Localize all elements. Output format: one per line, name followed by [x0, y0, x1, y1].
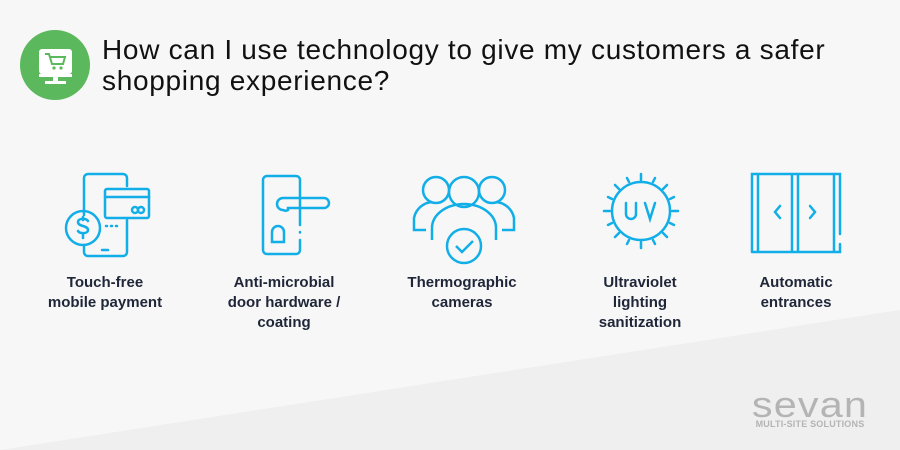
icon: green circle monitor cart — [20, 30, 90, 100]
icon: mobile payment — [64, 172, 150, 258]
label: cameras: cameras — [432, 294, 492, 311]
icon: door handle — [262, 174, 330, 256]
label: UV: lighting — [613, 294, 667, 311]
logo: sevan: MULTI-SITE SOLUTIONS — [756, 419, 864, 429]
label: cameras — [407, 274, 517, 311]
label: door: Anti-microbial — [234, 274, 334, 291]
label: mobile payment: mobile payment — [48, 294, 162, 311]
logo: sevan: sevan — [752, 384, 868, 425]
label: entrances — [759, 274, 833, 311]
label: UV: sanitization — [599, 314, 681, 331]
icon: automatic door — [750, 172, 842, 254]
label: mobile payment — [48, 274, 162, 311]
title: How can I use technology to give my customers a safer shopping experience? — [102, 34, 825, 96]
label: mobile payment: Touch-free — [67, 274, 143, 291]
label: door: coating — [257, 314, 311, 331]
label: UV — [599, 274, 681, 331]
label: door: door hardware / — [228, 294, 340, 311]
label: UV: Ultraviolet — [603, 274, 677, 291]
label: cameras: Thermographic — [407, 274, 517, 291]
label: entrances: Automatic — [759, 274, 833, 291]
icon: people check — [412, 176, 516, 264]
label: entrances: entrances — [761, 294, 831, 311]
icon: UV sun — [602, 172, 680, 250]
label: door — [228, 274, 340, 331]
